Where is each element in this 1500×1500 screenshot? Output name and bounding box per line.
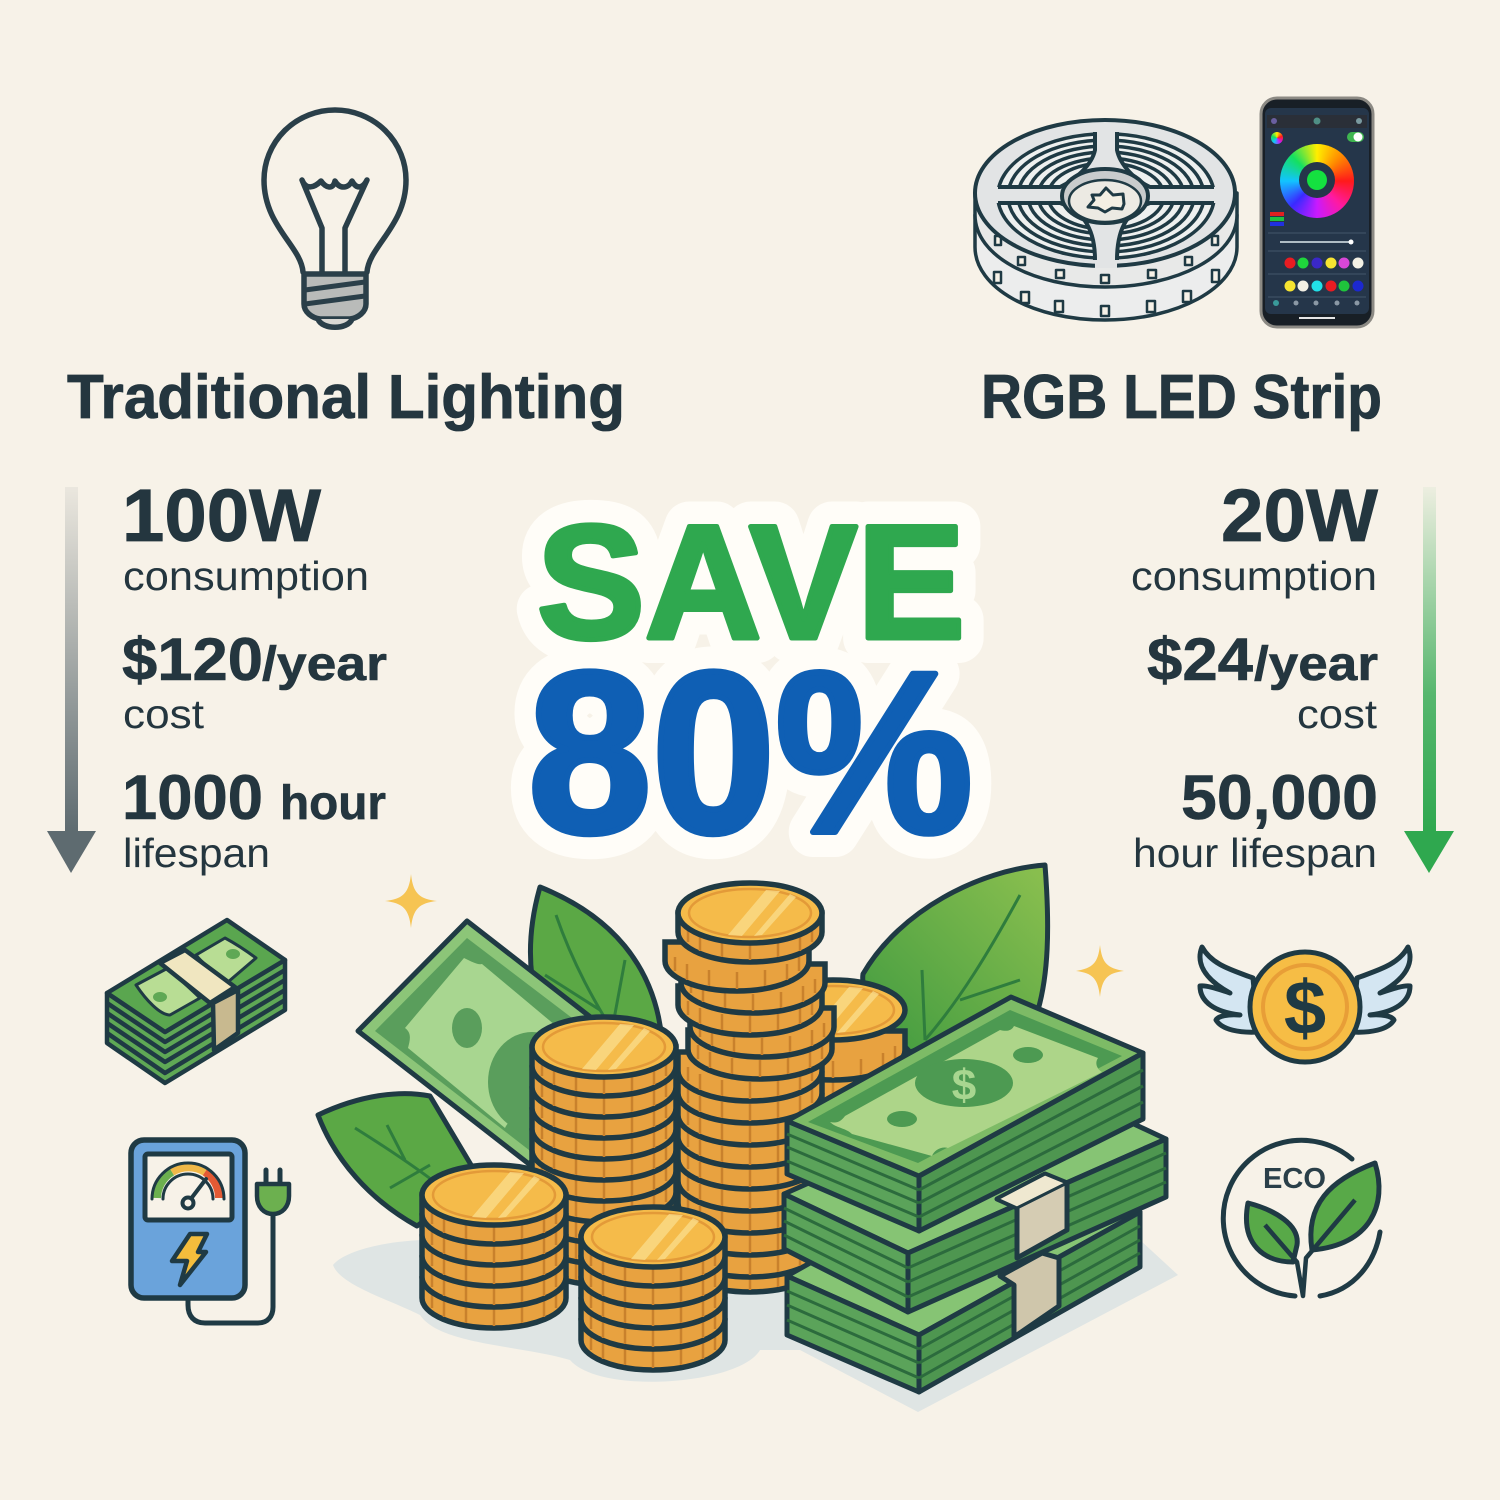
heading: 80%: 80% [528, 624, 973, 881]
panel: RGB LED strip [975, 98, 1454, 1296]
stat: $120/year cost: $120 [122, 626, 263, 693]
stat: 50,000 hour lifespan: hour lifespan [1133, 830, 1377, 876]
cash stack: top: $ [952, 1061, 976, 1110]
callout: SAVE 80% [528, 492, 973, 881]
icon: electric meter with plug [131, 1140, 289, 1323]
icon: eco leaves badge [1223, 1140, 1380, 1296]
icon: smartphone with color app [1261, 98, 1373, 327]
stat: 50,000 hour lifespan [1133, 763, 1378, 876]
sparkle right [1076, 945, 1124, 997]
arrow: decline grey [47, 487, 96, 873]
stat: $24/year cost: /year [1254, 638, 1378, 691]
icon: winged dollar coin [1200, 947, 1410, 1062]
leaf top left [530, 887, 662, 1050]
leaf top right [863, 865, 1048, 1052]
coin stack: back right [761, 980, 905, 1122]
icon: bundle of cash [107, 920, 285, 1083]
white halo behind text [528, 492, 973, 881]
stat: 1000 hour lifespan: lifespan [123, 830, 270, 876]
stat: $24/year cost: $24 [1147, 626, 1254, 693]
icon: eco leaves badge: ECO [1263, 1163, 1326, 1195]
icon: light bulb [264, 110, 406, 327]
loose dollar bill [358, 921, 638, 1164]
cash stack: bottom [787, 1150, 1140, 1392]
stat: 1000 hour lifespan: 1000 [122, 763, 263, 833]
sparkle left [385, 874, 437, 928]
arrow: decline green [1404, 487, 1454, 873]
stat: 20W consumption: consumption [1131, 553, 1377, 599]
heading: SAVE: SAVE [537, 492, 965, 673]
stat: $120/year cost: /year [262, 638, 387, 691]
stat: $120/year cost: cost [123, 691, 205, 737]
stat: 1000 hour lifespan: hour [280, 777, 386, 830]
heading: RGB LED Strip: RGB LED Strip [981, 363, 1382, 432]
stat: $120/year cost [122, 626, 387, 737]
stat: 100W consumption: 100W [122, 474, 321, 557]
heading: Traditional Lighting: Traditional Lighting [67, 363, 625, 432]
icon: LED strip reel [975, 120, 1237, 320]
stat: $24/year cost [1147, 626, 1378, 737]
coin stack: front left [422, 1165, 566, 1328]
stat: 1000 hour lifespan [122, 763, 386, 876]
white halo behind text: 80% [528, 624, 973, 881]
cash stack: middle [784, 1080, 1166, 1312]
coin stack: tall center [665, 883, 834, 1292]
stat: 100W consumption: consumption [123, 553, 369, 599]
stat: 20W consumption: 20W [1221, 474, 1378, 557]
panel: traditional lighting [47, 110, 625, 1323]
stat: $24/year cost: cost [1297, 691, 1378, 737]
stat: 100W consumption [122, 474, 369, 599]
coin stack: front middle [581, 1207, 725, 1370]
stat: 20W consumption [1131, 474, 1378, 599]
cash stack: top [787, 997, 1143, 1231]
coin stack: back left [532, 1017, 676, 1285]
leaf bottom left [318, 1094, 480, 1226]
white halo behind text: SAVE [537, 492, 965, 673]
icon: winged dollar coin: $ [1284, 966, 1326, 1051]
illustration: money pile [318, 865, 1178, 1412]
ground shadow [333, 1240, 1178, 1412]
stat: 50,000 hour lifespan: 50,000 [1181, 763, 1378, 833]
